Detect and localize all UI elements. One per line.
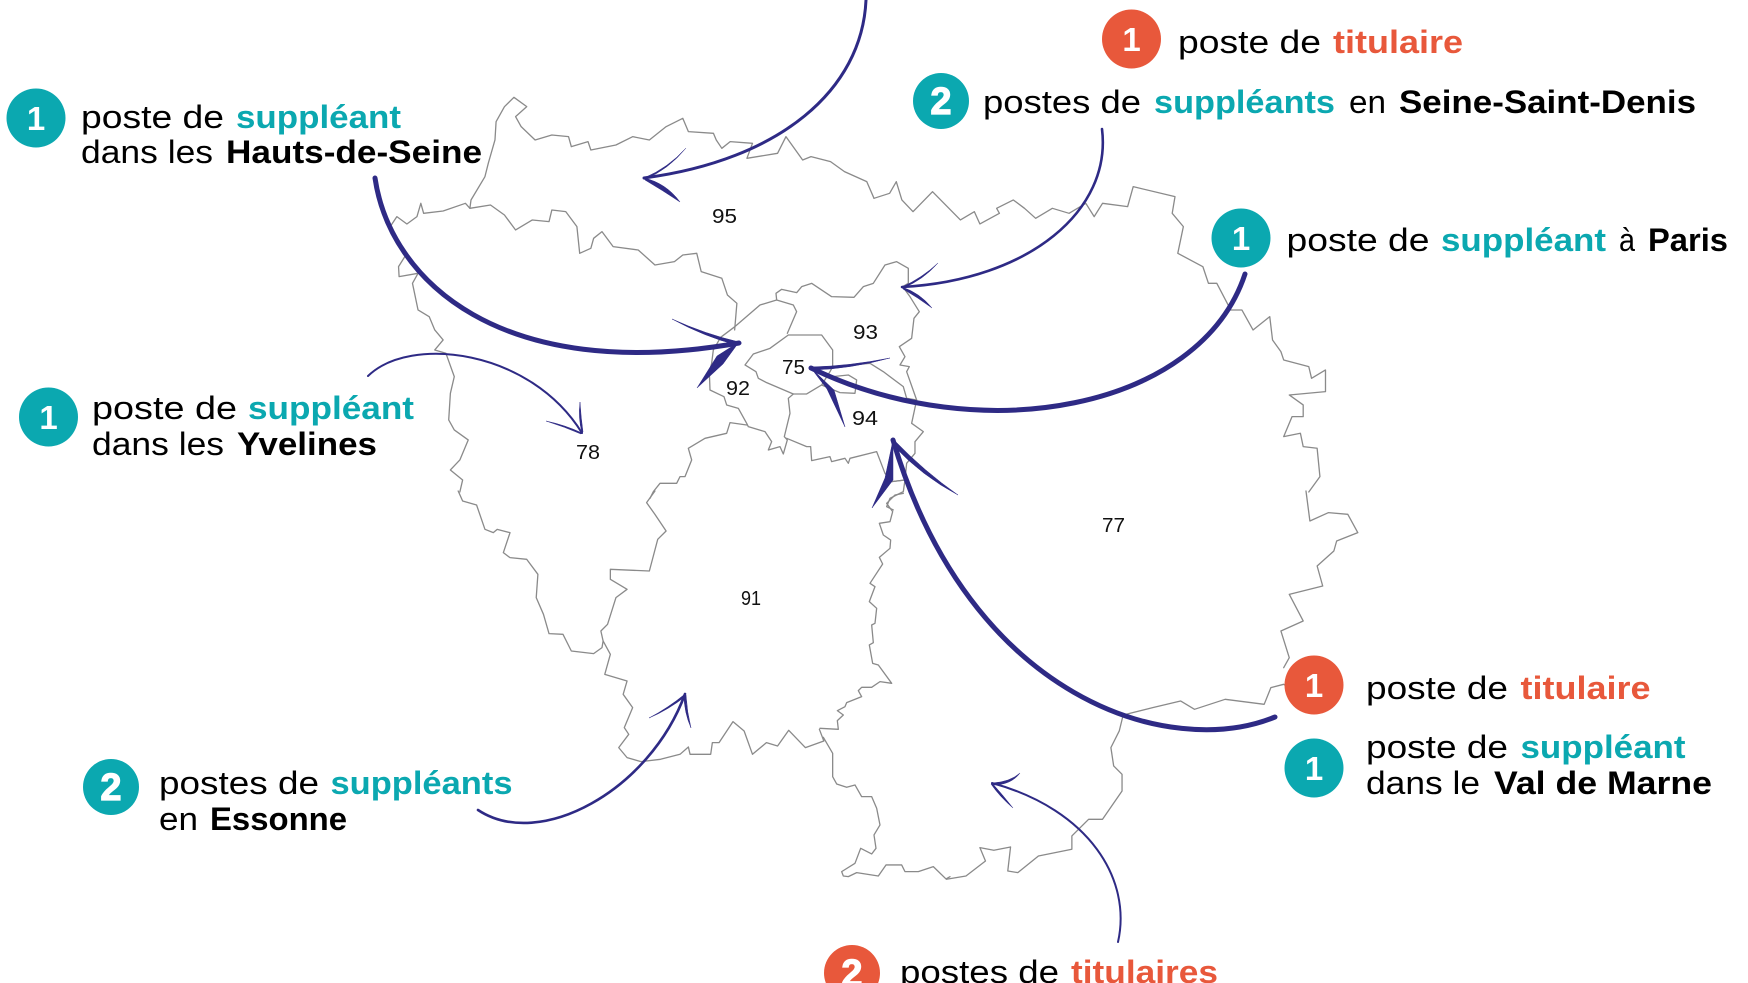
callout: titulaire top: [1102, 10, 1463, 68]
badge: 2 suppléants: 2: [100, 767, 122, 809]
label text: [92, 390, 414, 462]
label text: suppléant: [1520, 729, 1686, 765]
callout: titulaires bottom: [824, 945, 1218, 983]
department numbers: 92: [726, 378, 750, 400]
callout: Seine-Saint-Denis: [913, 73, 1696, 129]
department numbers: 91: [741, 588, 761, 610]
label text: [81, 99, 482, 170]
badge: 1 suppléant: [1284, 738, 1344, 798]
badge: 1 suppléant: [19, 388, 78, 446]
arrow: Essonne: [478, 694, 691, 823]
label text: Hauts-de-Seine: [226, 134, 482, 170]
badge: 1 suppléant: 1: [1232, 220, 1250, 257]
badge: 1 suppléant: 1: [39, 399, 58, 436]
label text: dans les: [92, 426, 224, 462]
badge: 1 titulaire: 1: [1305, 667, 1323, 704]
department numbers: 93: [853, 322, 878, 344]
label text: en: [159, 801, 198, 837]
callout: Essonne: [83, 759, 512, 837]
label text: suppléants: [1154, 84, 1335, 120]
callout: Paris: [1212, 208, 1728, 268]
department numbers: 78: [576, 442, 600, 464]
department numbers: [576, 206, 1125, 610]
label text: postes de: [159, 765, 319, 801]
department numbers: 94: [852, 408, 878, 430]
arrow: bottom to Seine-et-Marne: [991, 773, 1121, 942]
badge: 1 titulaire: [1102, 10, 1161, 68]
badge: 1 suppléant: [1212, 208, 1270, 268]
arrow: Seine-Saint-Denis: [902, 129, 1103, 308]
arrow: Yvelines: [368, 354, 583, 434]
arrow: top to Val-d'Oise: [644, 0, 866, 202]
label text: à: [1619, 222, 1635, 258]
label text: Yvelines: [237, 426, 377, 462]
badge: 2 suppléants: 2: [930, 81, 952, 123]
label text: Paris: [1648, 222, 1728, 258]
callout: Hauts-de-Seine: [6, 88, 482, 170]
badge: 2 titulaires: [824, 945, 880, 983]
label text: Seine-Saint-Denis: [1399, 84, 1696, 120]
label text: suppléant: [248, 390, 414, 426]
label text: [1178, 24, 1463, 60]
label text: [983, 84, 1696, 120]
label text: suppléant: [236, 99, 401, 135]
callout: Yvelines: [19, 388, 414, 462]
badge: 2 suppléants: [913, 73, 969, 129]
label text: titulaire: [1520, 670, 1650, 706]
label text: postes de: [983, 84, 1141, 120]
label text: Val de Marne: [1494, 765, 1712, 801]
badge: 1 titulaire: 1: [1122, 21, 1141, 58]
label text: poste de: [1366, 670, 1508, 706]
arrow: Paris: [811, 274, 1245, 427]
label text: poste de: [92, 390, 237, 426]
label text: [900, 954, 1218, 983]
label text: suppléant: [1441, 222, 1606, 258]
department numbers: 75: [782, 357, 805, 379]
label text: dans le: [1366, 765, 1480, 801]
label text: poste de: [1286, 222, 1430, 258]
arrow: Val de Marne: [872, 440, 1275, 730]
department numbers: 95: [712, 206, 737, 228]
badge: 1 suppléant: 1: [27, 100, 45, 137]
label text: titulaire: [1333, 24, 1463, 60]
department numbers: 77: [1102, 515, 1125, 537]
label text: Essonne: [210, 801, 347, 837]
badge: 1 titulaire: [1284, 656, 1344, 714]
label text: [159, 765, 512, 837]
department outlines: [390, 97, 1358, 879]
badge: 1 suppléant: [6, 88, 66, 148]
badge: 1 suppléant: 1: [1305, 750, 1323, 787]
label text: en: [1349, 84, 1386, 120]
label text: suppléants: [330, 765, 512, 801]
label text: [1366, 670, 1712, 801]
label text: poste de: [81, 99, 224, 135]
label text: poste de: [1366, 729, 1508, 765]
callout: Val de Marne: [1284, 656, 1712, 801]
badge: 2 suppléants: [83, 759, 139, 815]
label text: [1286, 222, 1728, 258]
label text: dans les: [81, 134, 213, 170]
arrow: Hauts-de-Seine: [375, 178, 739, 388]
map of Île-de-France departments: [390, 97, 1358, 879]
label text: poste de: [1178, 24, 1321, 60]
